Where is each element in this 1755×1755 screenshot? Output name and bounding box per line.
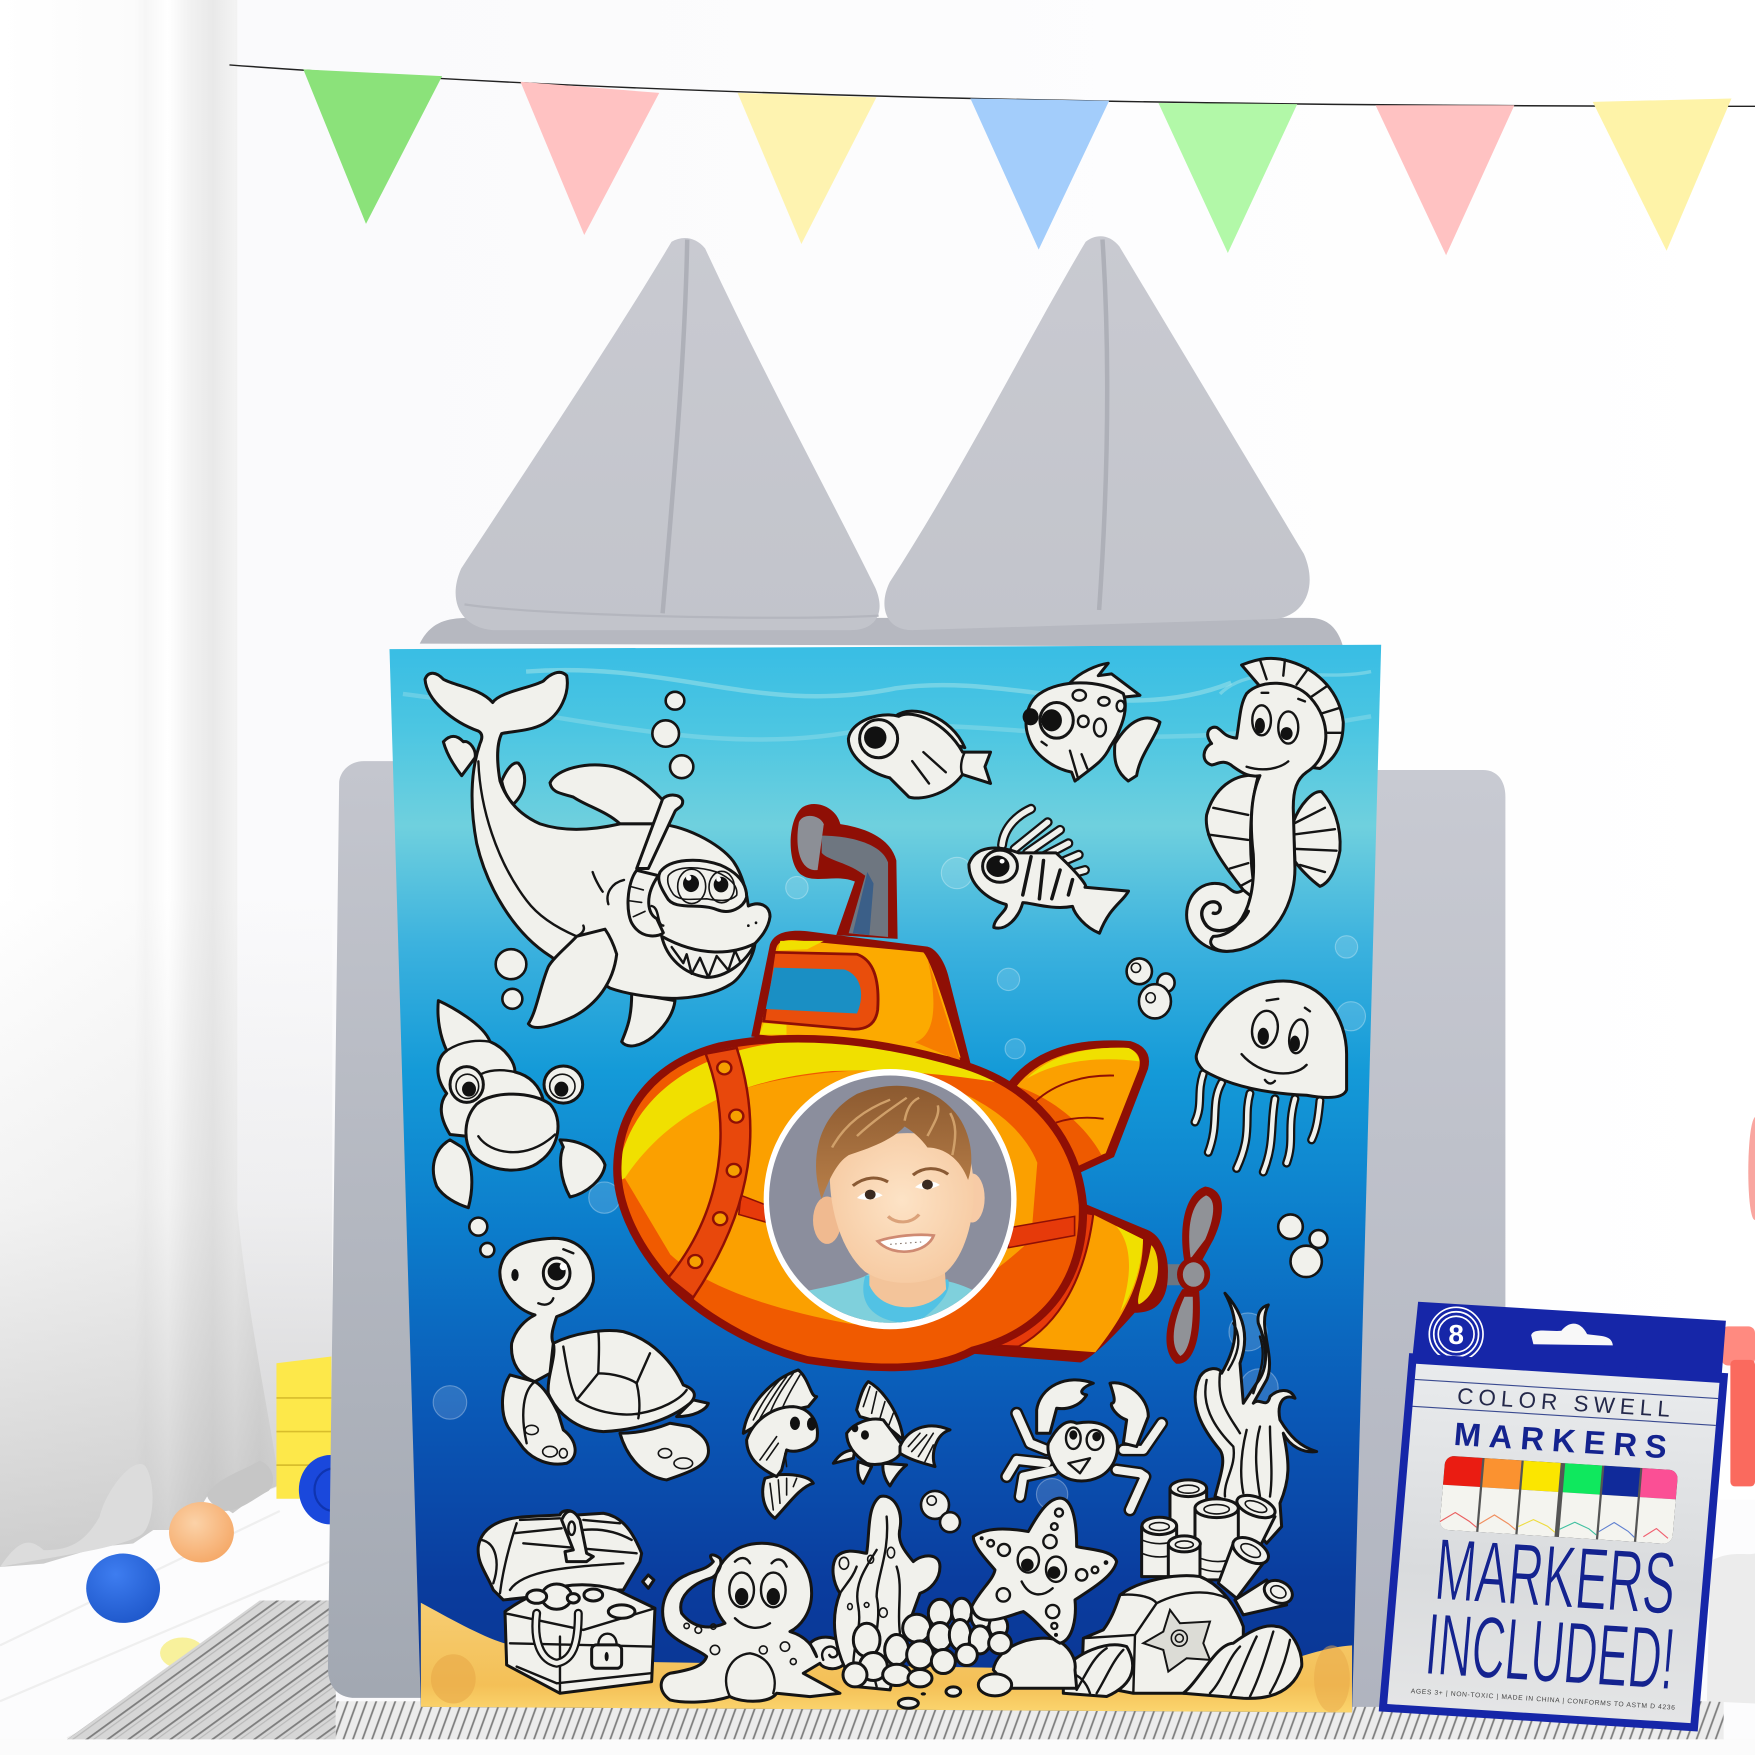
conning tower bbox=[751, 931, 971, 1065]
stern bbox=[969, 1203, 1168, 1363]
tube bbox=[1170, 1480, 1207, 1570]
periscope bbox=[791, 804, 898, 939]
neck bbox=[869, 1273, 946, 1308]
tall coral bbox=[833, 1496, 940, 1690]
ears bbox=[813, 1196, 841, 1244]
floor bbox=[0, 1500, 1755, 1755]
creatures lower right bbox=[843, 1293, 1317, 1708]
porthole with child photo bbox=[764, 1069, 1017, 1335]
background bubbles bbox=[433, 857, 1365, 1510]
sea background bbox=[390, 645, 1381, 1712]
creature: fish one bbox=[848, 711, 991, 798]
bubbles bbox=[921, 1491, 960, 1532]
marker yellow bbox=[1518, 1461, 1561, 1537]
shark fin cushion right bbox=[884, 236, 1310, 630]
blue ball bbox=[86, 1554, 160, 1623]
box front bbox=[1379, 1353, 1728, 1731]
bubble dome coral bbox=[843, 1598, 1011, 1687]
tube bbox=[1220, 1491, 1278, 1570]
smile bbox=[878, 1235, 934, 1252]
treasure pile bbox=[527, 1584, 635, 1618]
creature: hermit crab bbox=[433, 1001, 605, 1208]
gills bbox=[593, 872, 624, 904]
box flap bbox=[1413, 1302, 1726, 1379]
anemones bbox=[1063, 1626, 1302, 1698]
side cushion right bbox=[1343, 770, 1505, 1707]
tube bbox=[1168, 1536, 1200, 1577]
rock with shell star bbox=[1082, 1576, 1243, 1693]
tropical fish tail bbox=[900, 1426, 950, 1467]
tube bbox=[1235, 1576, 1296, 1615]
marker box bbox=[1379, 1302, 1728, 1731]
propeller bbox=[1160, 1187, 1222, 1364]
bubbles bbox=[1127, 958, 1175, 1018]
brand band bbox=[1413, 1379, 1718, 1425]
orange ball bbox=[169, 1502, 234, 1562]
hang hole bbox=[1531, 1324, 1613, 1345]
fluffy mat and red stool at right bbox=[1707, 1117, 1755, 1704]
creature: seahorse bbox=[1187, 658, 1343, 951]
seaweed bbox=[1195, 1293, 1317, 1543]
creature: turtle bbox=[469, 1218, 708, 1480]
eyes bbox=[857, 1192, 883, 1200]
creature: jellyfish bbox=[1196, 981, 1347, 1097]
yellow block bbox=[276, 1357, 331, 1499]
jellyfish tentacles bbox=[1195, 1074, 1320, 1172]
curtain bbox=[0, 0, 332, 1567]
marker orange bbox=[1478, 1458, 1522, 1534]
creature: tropical fish left bbox=[743, 1370, 817, 1518]
eight badge bbox=[1429, 1307, 1483, 1361]
tube bbox=[1142, 1517, 1177, 1577]
creature: starfish bbox=[972, 1498, 1117, 1643]
flag: blue bbox=[970, 98, 1109, 250]
sand bbox=[421, 1603, 1352, 1712]
shirt bbox=[808, 1274, 972, 1323]
treasure chest bbox=[478, 1511, 655, 1693]
handwritten headline bbox=[1422, 1520, 1685, 1708]
creatures upper left bbox=[425, 672, 770, 1208]
hull bbox=[617, 1039, 1083, 1367]
creature: bony fish bbox=[969, 809, 1129, 933]
string bbox=[229, 65, 1755, 106]
lower bubbles right bbox=[1278, 1214, 1327, 1277]
water highlights bbox=[403, 670, 1371, 740]
tail fin bbox=[1008, 1040, 1149, 1174]
hair bbox=[816, 1086, 971, 1199]
tube bbox=[1218, 1532, 1273, 1598]
face bbox=[830, 1133, 974, 1283]
curtain folds on floor bbox=[0, 1464, 153, 1567]
marker red bbox=[1439, 1456, 1482, 1532]
ocean blanket bbox=[390, 645, 1381, 1712]
side cushion left bbox=[328, 761, 425, 1698]
creature: crab bbox=[1007, 1380, 1162, 1510]
tube corals bbox=[1142, 1480, 1296, 1615]
shark bubbles bbox=[496, 692, 693, 1009]
creature: diving shark bbox=[425, 672, 770, 1046]
shark fin cushion left bbox=[456, 238, 880, 630]
fine print: AGES 3+ | NON-TOXIC | MADE IN CHINA | CONFORMS TO ASTM D 4236 bbox=[1410, 1688, 1675, 1712]
submarine bbox=[617, 804, 1222, 1367]
markers window bbox=[1439, 1456, 1678, 1544]
flag: yellow bbox=[1593, 98, 1731, 251]
hull band with rivets bbox=[668, 1048, 750, 1298]
rug bbox=[67, 1601, 1724, 1739]
marker navy bbox=[1598, 1466, 1640, 1542]
flag: mint bbox=[1158, 103, 1297, 253]
marker pink bbox=[1636, 1468, 1678, 1544]
teeth bbox=[652, 906, 755, 977]
flag: green bbox=[303, 69, 442, 224]
floor toys left bbox=[86, 1357, 362, 1669]
marker green bbox=[1559, 1463, 1602, 1539]
creature: spotted fish bbox=[1023, 663, 1160, 781]
creature: octopus bbox=[661, 1543, 848, 1702]
nose bbox=[888, 1214, 919, 1222]
flag: pink bbox=[520, 82, 659, 235]
top cushion bar bbox=[420, 618, 1343, 647]
brand band: COLOR SWELL bbox=[1456, 1383, 1671, 1422]
tube bbox=[1195, 1499, 1238, 1580]
flag: yellow bbox=[738, 93, 876, 244]
snorkel bbox=[628, 795, 683, 936]
creature: tropical fish right bbox=[833, 1382, 907, 1486]
goggles bbox=[659, 860, 747, 911]
eight badge: 8 bbox=[1448, 1319, 1464, 1350]
creatures lower left bbox=[469, 1218, 940, 1702]
brand product name: MARKERS bbox=[1453, 1416, 1668, 1465]
bunting garland bbox=[229, 65, 1755, 255]
creatures upper right bbox=[1023, 658, 1347, 1172]
blue toy bbox=[299, 1455, 362, 1524]
pebbles bbox=[898, 1638, 1077, 1708]
flag: pink bbox=[1376, 105, 1514, 255]
